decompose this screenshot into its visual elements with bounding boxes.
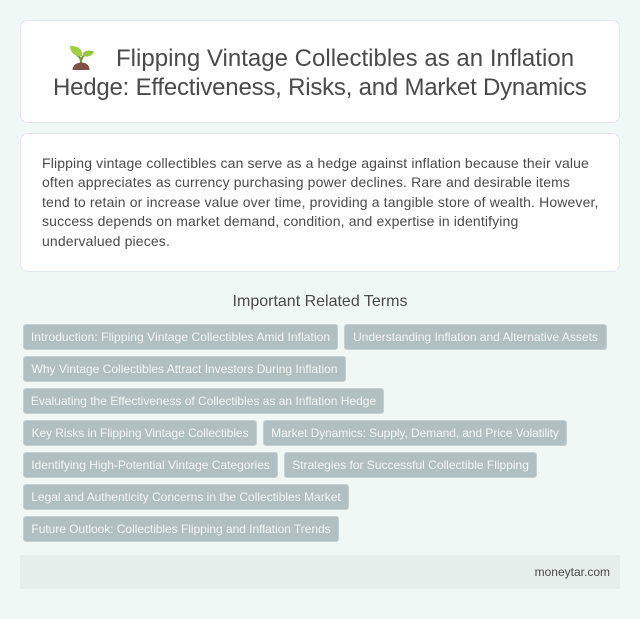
- tag: high-potential categories: Identifying High-Potential Vintage Categories: [31, 458, 270, 472]
- tag: legal concerns: Legal and Authenticity Concerns in the Collectibles Market: [31, 490, 341, 504]
- icon: sprout: [70, 46, 94, 70]
- tag: why collectibles: [23, 356, 346, 382]
- summary line 5: undervalued pieces.: [42, 233, 170, 249]
- tag: introduction: Introduction: Flipping Vintage Collectibles Amid Inflation: [31, 330, 330, 344]
- summary line 2: often appreciates as currency purchasing power declines. Rare and desirable items: [42, 174, 570, 190]
- summary line 4: success depends on market demand, condition, and expertise in identifying: [42, 213, 518, 229]
- panel: summary text: [20, 133, 620, 272]
- tag: why collectibles: Why Vintage Collectibles Attract Investors During Inflation: [32, 362, 337, 376]
- tag: effectiveness: [23, 388, 384, 414]
- tag: key risks: [23, 420, 257, 446]
- summary line 3: tend to retain or increase value over time, providing a tangible store of wealth. However,: [42, 194, 599, 210]
- tag: legal concerns: [23, 484, 349, 510]
- title line 2: Hedge: Effectiveness, Risks, and Market Dynamics: [53, 74, 587, 101]
- tag: introduction: [23, 324, 338, 350]
- heading: related terms: Important Related Terms: [233, 293, 407, 310]
- tag: high-potential categories: [23, 452, 278, 478]
- title line 1: Flipping Vintage Collectibles as an Inflation: [116, 45, 574, 72]
- footer source: moneytar.com: [535, 565, 610, 579]
- panel: title card: [20, 20, 620, 123]
- summary line 1: Flipping vintage collectibles can serve as a hedge against inflation because their value: [42, 155, 589, 171]
- tag: strategies: [284, 452, 537, 478]
- tag: strategies: Strategies for Successful Collectible Flipping: [292, 458, 529, 472]
- tag: future outlook: [23, 516, 339, 542]
- tag: understanding inflation: [344, 324, 607, 350]
- tag: market dynamics: [263, 420, 567, 446]
- tag: understanding inflation: Understanding Inflation and Alternative Assets: [353, 330, 598, 344]
- tag: future outlook: Future Outlook: Collectibles Flipping and Inflation Trends: [31, 522, 331, 536]
- tag: key risks: Key Risks in Flipping Vintage Collectibles: [32, 426, 248, 440]
- tag: effectiveness: Evaluating the Effectiveness of Collectibles as an Inflation Hedge: [31, 394, 376, 408]
- footer bar: [20, 555, 620, 589]
- tag list: [23, 324, 607, 542]
- tag: market dynamics: Market Dynamics: Supply, Demand, and Price Volatility: [271, 426, 559, 440]
